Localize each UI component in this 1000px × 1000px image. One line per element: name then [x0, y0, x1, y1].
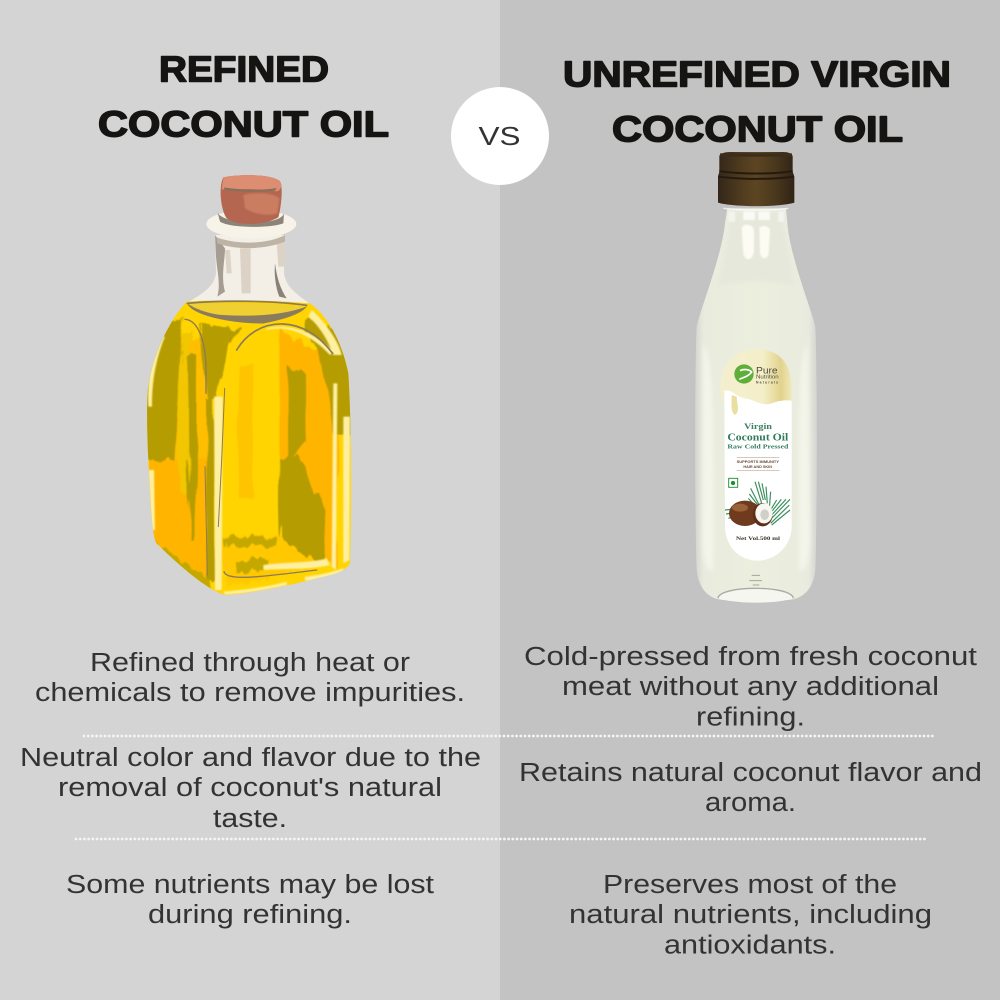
divider: first dotted line	[84, 735, 933, 737]
bottle cap	[718, 152, 794, 206]
panel: unrefined background	[500, 0, 1000, 1000]
product label	[720, 349, 792, 561]
bottle body	[695, 208, 817, 600]
outline strokes	[185, 301, 333, 577]
label text: Coconut Oil	[727, 432, 788, 443]
text: unrefined process: Cold-pressed from fresh coconut	[524, 643, 977, 671]
text: unrefined flavor	[519, 759, 982, 817]
bottle base	[718, 588, 793, 603]
text: refined flavor: Neutral color and flavor due to the	[20, 744, 481, 772]
panel: refined background	[0, 0, 500, 1000]
heading: unrefined virgin coconut oil: COCONUT OIL	[612, 108, 903, 149]
text: unrefined nutrients	[569, 871, 932, 960]
vs badge: VS	[478, 121, 520, 151]
text: refined process	[35, 649, 465, 707]
text: refined process: chemicals to remove impurities.	[35, 679, 465, 707]
label text: Virgin	[744, 422, 772, 431]
bottle lip	[206, 210, 296, 238]
cork	[221, 175, 282, 224]
label text: Raw Cold Pressed	[727, 444, 789, 451]
heading: refined coconut oil: COCONUT OIL	[98, 103, 389, 144]
heading: unrefined virgin coconut oil: UNREFINED VIRGIN	[563, 53, 951, 94]
text: unrefined process: meat without any additional	[562, 673, 939, 701]
text: unrefined nutrients: natural nutrients, including	[569, 901, 932, 929]
product label: Pure	[756, 365, 778, 375]
icon: refined oil bottle illustration	[140, 175, 357, 597]
text: unrefined process: refining.	[696, 704, 805, 732]
bottle neck	[187, 235, 310, 304]
heading: refined coconut oil: REFINED	[159, 48, 329, 89]
paint layers	[140, 303, 357, 597]
text: refined flavor	[20, 744, 481, 833]
text: refined process: Refined through heat or	[90, 649, 411, 677]
text: refined nutrients	[66, 871, 434, 929]
text: unrefined nutrients: antioxidants.	[664, 932, 836, 960]
product label: Naturals	[756, 380, 778, 384]
label text	[727, 422, 789, 542]
veg mark	[729, 478, 738, 487]
heading: unrefined virgin coconut oil	[563, 53, 951, 149]
text: refined nutrients: during refining.	[148, 901, 352, 929]
text: unrefined process	[524, 643, 977, 732]
divider: second dotted line	[76, 838, 925, 840]
vs badge	[451, 87, 549, 185]
logo	[734, 364, 754, 384]
text: unrefined flavor: aroma.	[705, 789, 796, 817]
heading: refined coconut oil	[98, 48, 389, 144]
text: unrefined flavor: Retains natural coconut flavor and	[519, 759, 982, 787]
icon: virgin coconut oil bottle	[695, 152, 817, 603]
palm leaves	[725, 482, 790, 525]
label text: Net Vol.500 ml	[736, 536, 781, 542]
coconuts	[729, 501, 761, 526]
label text: SUPPORTS IMMUNITY	[737, 460, 780, 464]
text: refined flavor: taste.	[213, 805, 287, 833]
pale highlights	[148, 310, 350, 595]
text: unrefined nutrients: Preserves most of the	[603, 871, 897, 899]
text: refined nutrients: Some nutrients may be lost	[66, 871, 434, 899]
oil body	[147, 300, 351, 595]
text: refined flavor: removal of coconut's natural	[58, 774, 442, 802]
product label: Nutrition	[756, 375, 779, 381]
label text: HAIR AND SKIN	[743, 465, 772, 469]
